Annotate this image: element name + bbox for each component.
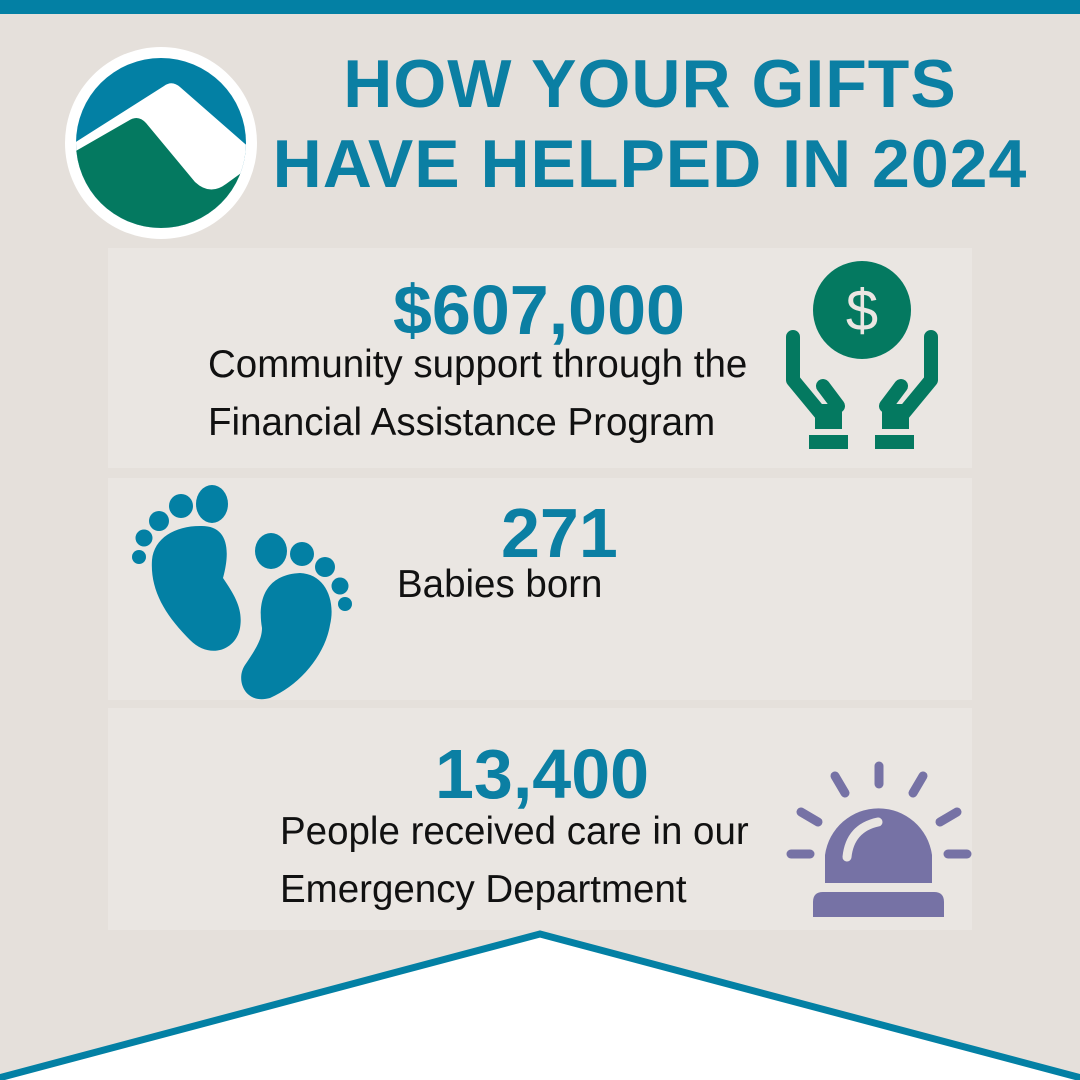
icon: hands with coin (786, 261, 938, 449)
title: HAVE HELPED IN 2024 (273, 126, 1027, 202)
stat number: 13,400 (435, 735, 649, 813)
description (280, 810, 749, 911)
bottom chevron (0, 930, 1080, 1080)
title: HOW YOUR GIFTS (343, 46, 957, 122)
icon: baby feet (132, 485, 352, 700)
panel: babies (108, 478, 972, 700)
panel: emergency (108, 708, 972, 930)
description: Financial Assistance Program (208, 401, 715, 444)
description: Community support through the (208, 343, 747, 386)
description: Babies born (397, 563, 602, 606)
top bar (0, 0, 1080, 14)
panel: financial assistance (108, 248, 972, 468)
icon: hands with coin: $ (846, 278, 878, 343)
icon: siren (786, 762, 972, 917)
title (273, 46, 1027, 202)
description (208, 343, 747, 444)
description: People received care in our (280, 810, 749, 853)
description: Emergency Department (280, 868, 687, 911)
stat number: $607,000 (393, 271, 685, 349)
logo (65, 47, 257, 239)
stat number: 271 (501, 494, 618, 572)
